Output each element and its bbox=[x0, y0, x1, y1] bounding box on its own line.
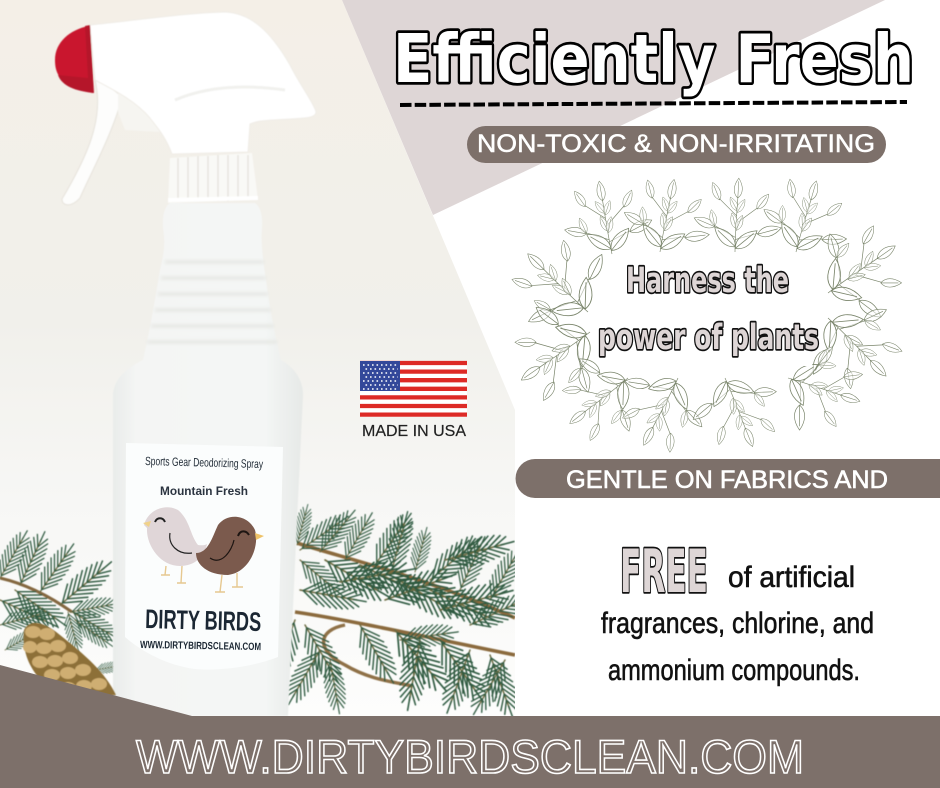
logo: two birds bbox=[143, 507, 264, 592]
free description bbox=[601, 561, 874, 687]
pill: gentle on fabrics: GENTLE ON FABRICS AND bbox=[566, 466, 888, 494]
ribbed bottle neck bbox=[147, 262, 277, 342]
red nozzle bbox=[55, 25, 94, 93]
light taupe corner panel bbox=[342, 0, 885, 215]
line three: ammonium compounds. bbox=[608, 654, 860, 687]
line one: of artificial bbox=[728, 561, 855, 594]
made in USA caption: MADE IN USA bbox=[362, 423, 467, 440]
line one: Harness the bbox=[626, 261, 789, 301]
leaf wreath bbox=[491, 169, 925, 466]
free word: FREE bbox=[620, 537, 708, 607]
threaded collar bbox=[168, 153, 258, 203]
wreath text plate bbox=[590, 260, 822, 366]
pill: gentle on fabrics bbox=[516, 459, 940, 498]
pine branches behind the bottle bbox=[0, 502, 532, 722]
trigger lever bbox=[62, 80, 122, 205]
wreath text bbox=[598, 261, 819, 358]
bottle body bbox=[113, 203, 303, 716]
label line: brand: DIRTY BIRDS bbox=[145, 604, 262, 637]
website URL: WWW.DIRTYBIRDSCLEAN.COM bbox=[136, 730, 804, 783]
product label bbox=[125, 443, 283, 670]
spray bottle bbox=[55, 12, 316, 716]
line two: fragrances, chlorine, and bbox=[601, 607, 874, 640]
photo panel: bottle on a cream background bbox=[0, 0, 532, 722]
line two: power of plants bbox=[598, 318, 819, 358]
pine cone bbox=[23, 623, 116, 700]
icon: American flag bbox=[360, 361, 467, 417]
bottom band bbox=[0, 665, 940, 788]
label line: product type: Sports Gear Deodorizing Spray bbox=[145, 454, 263, 471]
label line: website: WWW.DIRTYBIRDSCLEAN.COM bbox=[140, 639, 261, 653]
dashed divider bbox=[400, 102, 907, 105]
pill: non-toxic: NON-TOXIC & NON-IRRITATING bbox=[477, 130, 875, 158]
label line: scent: Mountain Fresh bbox=[160, 484, 248, 498]
pill: non-toxic bbox=[467, 126, 886, 163]
sprayer head bbox=[90, 12, 316, 154]
